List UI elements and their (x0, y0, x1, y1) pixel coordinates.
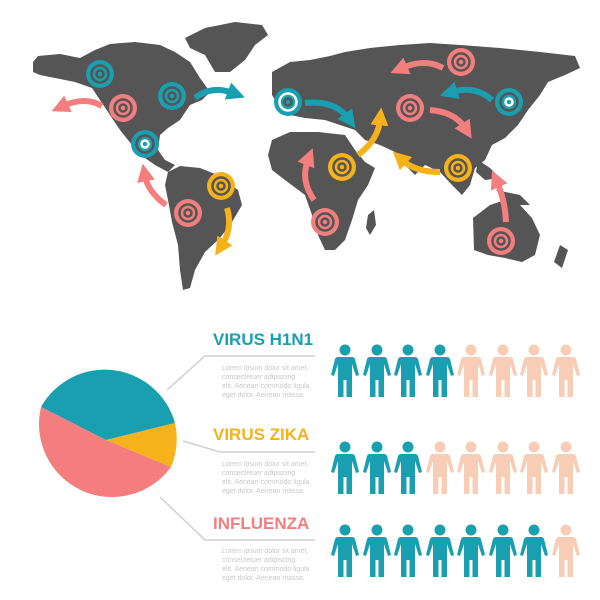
heading: VIRUS H1N1: VIRUS H1N1 (213, 330, 313, 349)
text block 2: Lorem ipsum dolor sit amet, (222, 461, 308, 468)
people pictograms (331, 344, 580, 577)
text block 3 (222, 548, 310, 582)
row 1: H1N1 4 of 8 (331, 344, 580, 397)
text block 3: consectetuer adipiscing (222, 557, 295, 564)
text block 1: Lorem ipsum dolor sit amet, (222, 365, 308, 372)
text block 1: consectetuer adipiscing (222, 374, 295, 381)
text block 2 (222, 460, 310, 495)
text block 3: Lorem ipsum dolor sit amet, (222, 548, 308, 555)
text block 3: eget dolor. Aenean massa. (222, 575, 305, 582)
heading: INFLUENZA: INFLUENZA (213, 514, 309, 533)
text block 2: elit. Aenean commodo ligula (222, 479, 310, 486)
text block 1 (222, 364, 310, 399)
text block 1: elit. Aenean commodo ligula (222, 383, 310, 390)
world map (33, 22, 580, 290)
infection targets (86, 48, 523, 255)
row 2: Zika 3 of 8 (331, 442, 580, 494)
text block 2: consectetuer adipiscing (222, 470, 295, 477)
pie chart with connector lines (39, 355, 315, 541)
arrows (63, 63, 506, 245)
continents (33, 22, 580, 290)
text block 3: elit. Aenean commodo ligula (222, 566, 310, 573)
text block 2: eget dolor. Aenean massa. (222, 488, 305, 495)
row 3: Influenza 7 of 8 (331, 524, 580, 577)
text block 1: eget dolor. Aenean massa. (222, 392, 305, 399)
heading: VIRUS ZIKA: VIRUS ZIKA (213, 425, 309, 444)
